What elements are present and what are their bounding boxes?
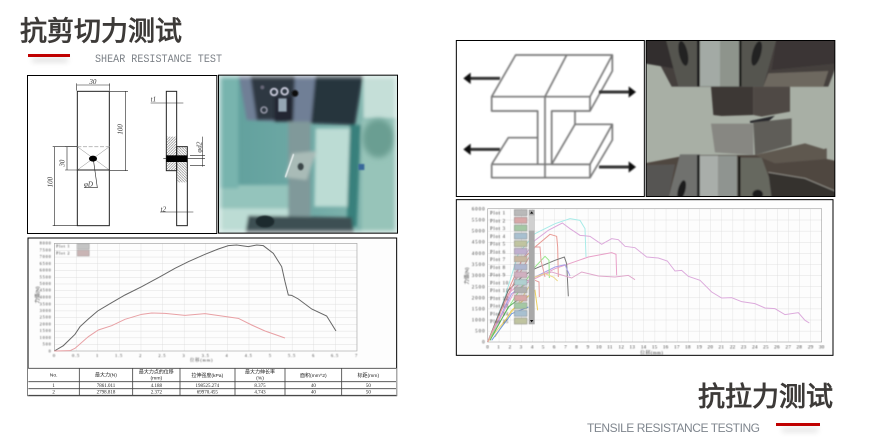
y axis tick labels: 2500 — [472, 285, 486, 290]
dimension labels: φd2 — [195, 141, 203, 153]
results table: 1 — [52, 384, 55, 389]
y axis tick labels: 1000 — [472, 319, 486, 324]
y axis tick labels: 4500 — [472, 241, 486, 246]
x axis tick labels: 6 — [312, 353, 315, 358]
y axis tick labels: 3500 — [40, 301, 52, 306]
results table: 最大力伸长率 — [245, 369, 275, 376]
results table: (mm) — [151, 376, 162, 382]
x axis tick labels: 8 — [575, 346, 578, 351]
x axis tick labels: 5 — [269, 353, 272, 358]
results table: 面积(mm^2) — [300, 372, 327, 379]
legend with scrollbar: Plot 9 — [490, 274, 506, 279]
results table: 2.372 — [151, 391, 162, 396]
y axis tick labels: 3500 — [472, 263, 486, 268]
chart legend: Plot 2 — [56, 251, 70, 256]
y axis tick labels: 4000 — [472, 252, 486, 257]
panel: tensile test chart — [456, 200, 833, 356]
x axis tick labels: 1.5 — [115, 353, 123, 358]
arrow: bottom left — [463, 144, 500, 155]
x axis tick labels: 6.5 — [331, 353, 339, 358]
x axis tick labels: 28 — [797, 346, 802, 351]
x axis tick labels: 17 — [674, 346, 680, 351]
curves — [488, 219, 809, 342]
results table: 拉伸强度(kPa) — [191, 372, 224, 379]
legend with scrollbar: Plot 4 — [490, 235, 506, 240]
legend with scrollbar: Plot 12 — [490, 297, 509, 302]
soft white photo edge — [218, 75, 398, 233]
y axis tick labels: 8000 — [40, 241, 52, 246]
y axis tick labels: 6000 — [472, 207, 486, 212]
x axis tick labels: 2 — [139, 353, 142, 358]
legend with scrollbar: Plot 3 — [490, 227, 506, 232]
title: shear resistance test — [20, 16, 222, 66]
x axis tick labels: 18 — [685, 346, 691, 351]
x axis tick labels: 30 — [819, 346, 825, 351]
results table: (%) — [256, 376, 264, 382]
x axis tick labels: 0 — [53, 353, 56, 358]
x axis tick labels: 3 — [520, 346, 523, 351]
dimension labels: 30 — [58, 159, 66, 168]
x axis tick labels: 位移(mm) — [190, 356, 213, 363]
results table: 4.188 — [151, 384, 162, 389]
x axis tick labels: 20 — [708, 346, 713, 351]
dimension labels: φD — [84, 181, 93, 189]
y axis title: 力值(N) — [463, 267, 470, 284]
results table: 最大力(N) — [95, 372, 117, 379]
results table: 40 — [311, 384, 316, 389]
x axis tick labels: 16 — [663, 346, 669, 351]
legend with scrollbar: Plot 7 — [490, 258, 506, 263]
grip bolts — [256, 85, 364, 228]
results table: 2798.818 — [97, 391, 116, 396]
results table: 2 — [52, 391, 55, 396]
results table: 7861.011 — [97, 384, 116, 389]
legend with scrollbar — [490, 210, 535, 325]
y axis tick labels: 500 — [43, 342, 52, 347]
x axis tick labels: 6 — [553, 346, 556, 351]
results table: 40 — [311, 391, 316, 396]
x axis tick labels: 7 — [355, 353, 358, 358]
x axis tick labels: 9 — [587, 346, 590, 351]
y axis tick labels: 7500 — [40, 247, 52, 252]
y axis tick labels: 6000 — [40, 268, 52, 273]
x axis tick labels: 0 — [486, 346, 489, 351]
x axis tick labels: 29 — [808, 346, 814, 351]
panel: specimen technical drawing — [27, 75, 217, 233]
y axis title: 力值(N) — [34, 286, 41, 303]
legend with scrollbar: Plot 11 — [490, 289, 509, 294]
x axis tick labels: 14 — [641, 346, 647, 351]
front view drawing — [53, 83, 128, 226]
y axis tick labels: 2000 — [40, 321, 52, 326]
line chart: two force curves — [34, 241, 358, 363]
x axis tick labels: 4 — [225, 353, 228, 358]
x axis tick labels: 2.5 — [158, 353, 166, 358]
x axis tick labels: 3 — [182, 353, 185, 358]
legend with scrollbar: Plot 2 — [490, 219, 506, 224]
subtitle: shear: SHEAR RESISTANCE TEST — [95, 54, 222, 66]
x axis tick labels: 21 — [719, 346, 724, 351]
x axis tick labels: 5 — [542, 346, 545, 351]
results table: No. — [50, 373, 58, 379]
y axis tick labels: 3000 — [40, 308, 52, 313]
results table: 50 — [366, 391, 371, 396]
centre bolt — [89, 156, 97, 162]
results table: 最大力点的位移 — [139, 369, 174, 376]
y axis tick labels: 1500 — [472, 307, 486, 312]
dimension labels: t1 — [151, 95, 156, 103]
x axis tick labels: 25 — [763, 346, 769, 351]
results table: 8.375 — [254, 384, 266, 389]
y axis tick labels: 4500 — [40, 288, 52, 293]
results table: 69970.455 — [197, 391, 218, 396]
x axis tick labels: 2 — [509, 346, 512, 351]
line chart: multiple force curves — [463, 207, 825, 356]
legend with scrollbar: Plot 8 — [490, 266, 506, 271]
arrow: top right — [599, 86, 636, 98]
title: tensile resistance testing — [587, 382, 833, 435]
legend with scrollbar: Plot 10 — [490, 281, 509, 286]
chart legend — [56, 244, 89, 256]
legend with scrollbar: Plot 5 — [490, 243, 506, 248]
x axis tick labels: 27 — [786, 346, 791, 351]
y axis tick labels: 500 — [475, 330, 486, 335]
x axis tick labels: 7 — [564, 346, 567, 351]
y axis tick labels: 5500 — [472, 219, 486, 224]
y axis tick labels: 5000 — [40, 281, 52, 286]
x axis tick labels — [486, 346, 825, 356]
x axis tick labels: 4 — [531, 346, 534, 351]
x axis tick labels: 19 — [697, 346, 702, 351]
panel: shear test chart and table — [28, 238, 397, 396]
x axis tick labels: 5.5 — [288, 353, 296, 358]
heading: shear: 抗剪切力测试 — [20, 16, 182, 46]
y axis tick labels — [472, 207, 486, 346]
side view rivet — [166, 155, 187, 162]
results table: 标距(mm) — [358, 372, 379, 379]
y axis tick labels: 1000 — [40, 335, 52, 340]
x axis tick labels: 12 — [619, 346, 624, 351]
legend with scrollbar: Plot 1 — [490, 212, 506, 217]
curve: plot 1 — [54, 245, 336, 351]
x axis tick labels: 15 — [652, 346, 658, 351]
x axis tick labels: 10 — [596, 346, 602, 351]
y axis tick labels: 2000 — [472, 296, 486, 301]
dimension labels: 30 — [88, 78, 97, 86]
y axis tick labels: 0 — [482, 341, 486, 346]
arrow: top left — [463, 73, 500, 84]
x axis tick labels: 0.5 — [72, 353, 80, 358]
dimension labels: 100 — [47, 176, 55, 187]
red accent bar: shear — [28, 54, 70, 62]
panel: shear test photo — [218, 73, 398, 235]
y axis tick labels: 5000 — [472, 230, 486, 235]
red accent bar: tensile — [776, 423, 820, 432]
legend with scrollbar: Plot 14 — [490, 312, 509, 317]
dimension labels — [47, 78, 203, 213]
x axis tick labels: 22 — [730, 346, 736, 351]
y axis tick labels: 2500 — [40, 315, 52, 320]
y axis tick labels: 1500 — [40, 328, 52, 333]
x axis tick labels: 1 — [96, 353, 99, 358]
arrow: bottom right — [599, 161, 636, 173]
x axis tick labels: 26 — [774, 346, 780, 351]
y axis tick labels: 3000 — [472, 274, 486, 279]
x axis tick labels: 24 — [752, 346, 758, 351]
y axis tick labels: 5500 — [40, 274, 52, 279]
legend with scrollbar: Plot 6 — [490, 250, 506, 255]
subtitle: tensile: TENSILE RESISTANCE TESTING — [587, 421, 760, 435]
x axis tick labels: 3.5 — [202, 353, 210, 358]
results table: 4.743 — [254, 391, 266, 396]
y axis tick labels: 6500 — [40, 261, 52, 266]
x axis tick labels — [53, 353, 358, 363]
side view drawing — [151, 91, 205, 226]
y axis tick labels: 0 — [49, 348, 52, 353]
x axis tick labels: 4.5 — [245, 353, 253, 358]
y axis tick labels: 7000 — [40, 254, 52, 259]
x axis tick labels: 13 — [630, 346, 635, 351]
legend with scrollbar: Plot 15 — [490, 320, 509, 325]
y axis tick labels — [40, 241, 52, 353]
panel: tensile test photo — [644, 38, 837, 201]
results table: 198525.274 — [195, 384, 220, 389]
x axis tick labels: 23 — [741, 346, 747, 351]
heading: tensile: 抗拉力测试 — [698, 382, 833, 412]
I-beam outline — [492, 55, 612, 178]
panel: I-beam tensile shear diagram — [456, 40, 644, 196]
chart legend: Plot 1 — [56, 244, 70, 249]
dimension labels: t2 — [161, 205, 167, 213]
x axis tick labels: 1 — [497, 346, 500, 351]
results table: 50 — [366, 384, 371, 389]
y axis tick labels: 4000 — [40, 295, 52, 300]
x axis tick labels: 位移(mm) — [640, 349, 663, 356]
curve: plot 2 — [54, 313, 285, 351]
dimension labels: 100 — [117, 124, 125, 135]
legend with scrollbar: Plot 13 — [490, 305, 509, 310]
results table — [28, 368, 397, 396]
x axis tick labels: 11 — [607, 346, 613, 351]
